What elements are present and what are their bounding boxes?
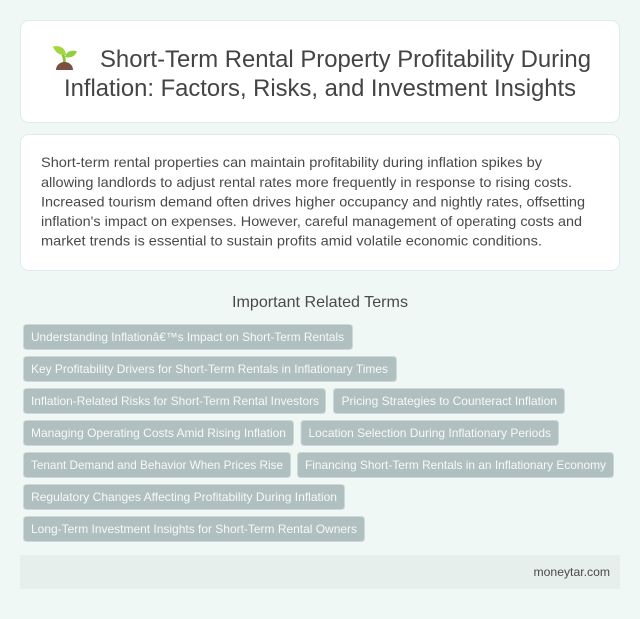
tag: inflation-related risks xyxy=(24,388,326,414)
tag: pricing strategies xyxy=(334,388,564,414)
panel: related term tags xyxy=(24,324,614,542)
title: Inflation: Factors, Risks, and Investment Insights xyxy=(64,75,576,102)
tag: managing operating costs: Managing Operating Costs Amid Rising Inflation xyxy=(31,426,286,440)
text block: summary: market trends is essential to sustain profits amid volatile economic conditions. xyxy=(41,232,542,248)
text block: summary: inflation's impact on expenses. However, careful management of operating costs and xyxy=(41,213,582,229)
tag: location selection: Location Selection During Inflationary Periods xyxy=(308,426,551,440)
title: Short-Term Rental Property Profitability During xyxy=(100,46,591,73)
text block: summary: Increased tourism demand often drives higher occupancy and nightly rates, offsetting xyxy=(41,194,585,210)
title xyxy=(64,46,591,102)
tag: long-term insights xyxy=(24,516,364,542)
tag: inflation-related risks: Inflation-Related Risks for Short-Term Rental Investors xyxy=(31,394,319,408)
icon: seedling xyxy=(53,46,77,70)
text block: summary xyxy=(41,154,585,248)
tag: location selection xyxy=(301,420,558,446)
tag: regulatory changes: Regulatory Changes Affecting Profitability During Inflation xyxy=(31,490,337,504)
tag: pricing strategies: Pricing Strategies to Counteract Inflation xyxy=(342,394,557,408)
tag: financing: Financing Short-Term Rentals in an Inflationary Economy xyxy=(305,458,606,472)
tag: financing xyxy=(298,452,614,478)
tag: long-term insights: Long-Term Investment Insights for Short-Term Rental Owners xyxy=(31,522,357,536)
panel: summary paragraph xyxy=(20,134,620,270)
text block: summary: allowing landlords to adjust rental rates more frequently in response to rising costs. xyxy=(41,174,572,190)
tag: tenant demand xyxy=(24,452,290,478)
footer: site name: moneytar.com xyxy=(534,565,610,579)
tag: regulatory changes xyxy=(24,484,344,510)
tag: tenant demand: Tenant Demand and Behavior When Prices Rise xyxy=(31,458,283,472)
heading: important related terms: Important Related Terms xyxy=(232,294,408,311)
tag: understanding inflation: Understanding Inflationâ€™s Impact on Short-Term Rentals xyxy=(31,330,344,344)
text block: summary: Short-term rental properties can maintain profitability during inflation spikes by xyxy=(41,154,542,170)
tag: understanding inflation xyxy=(24,324,352,350)
footer bar xyxy=(20,555,620,589)
tag: managing operating costs xyxy=(24,420,294,446)
tag: profitability drivers xyxy=(24,356,396,382)
tag: profitability drivers: Key Profitability Drivers for Short-Term Rentals in Inflationary Times xyxy=(31,362,388,376)
panel: title card xyxy=(20,20,620,122)
